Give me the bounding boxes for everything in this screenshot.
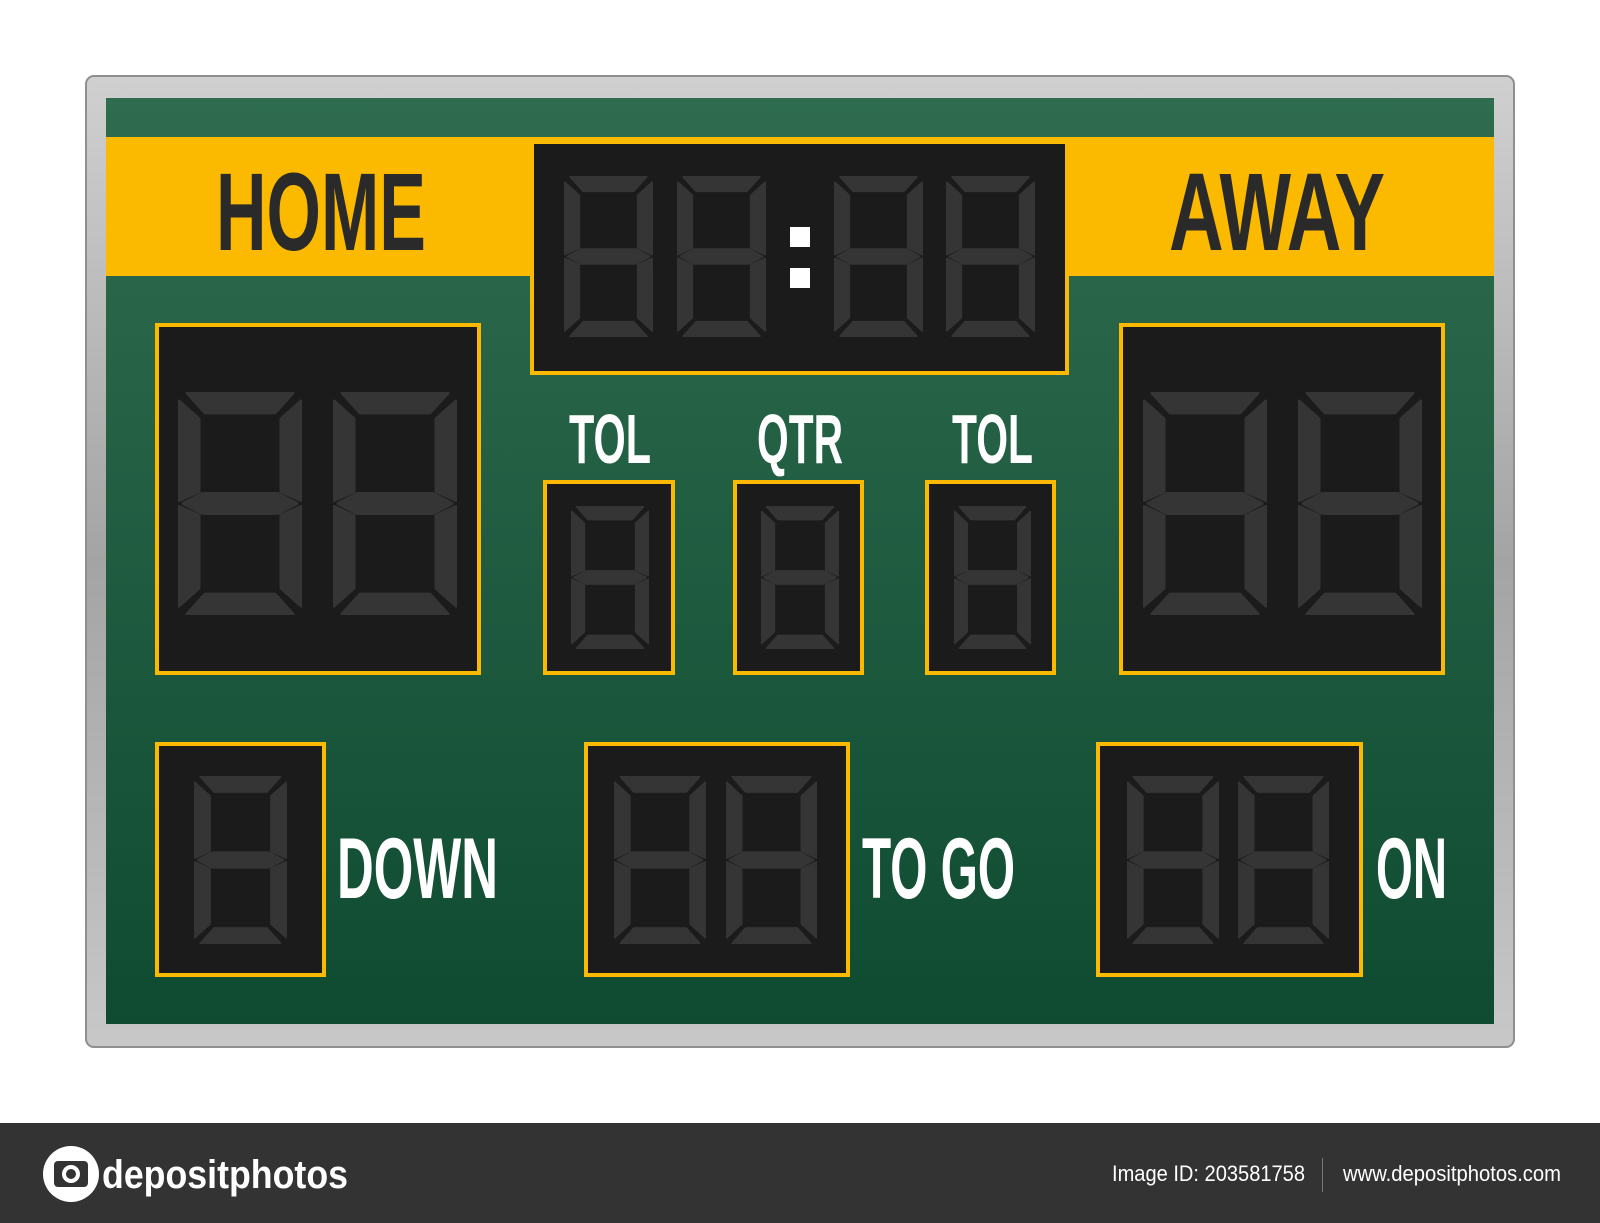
header band	[106, 137, 1494, 276]
clock display	[532, 142, 1067, 373]
title: HOME: HOME	[216, 151, 426, 274]
footer bar	[0, 1123, 1600, 1223]
label: QTR: QTR	[757, 400, 843, 478]
label: TO GO: TO GO	[862, 821, 1015, 917]
label: DOWN: DOWN	[337, 821, 498, 917]
TO GO box	[586, 744, 848, 975]
label: ON: ON	[1376, 821, 1447, 917]
TOL home box	[545, 482, 673, 673]
ON box	[1098, 744, 1361, 975]
label: TOL away: TOL	[952, 400, 1033, 478]
away score	[1121, 325, 1443, 673]
QTR box	[735, 482, 862, 673]
title: AWAY: AWAY	[1169, 151, 1385, 274]
label: TOL home: TOL	[569, 400, 651, 478]
logo text: depositphotos	[102, 1153, 348, 1197]
frame	[86, 76, 1514, 1047]
icon: camera logo	[43, 1146, 99, 1202]
DOWN box	[157, 744, 324, 975]
TOL away box	[927, 482, 1054, 673]
home score	[157, 325, 479, 673]
website: www.depositphotos.com	[1342, 1161, 1561, 1186]
image id: Image ID: 203581758	[1112, 1161, 1305, 1186]
